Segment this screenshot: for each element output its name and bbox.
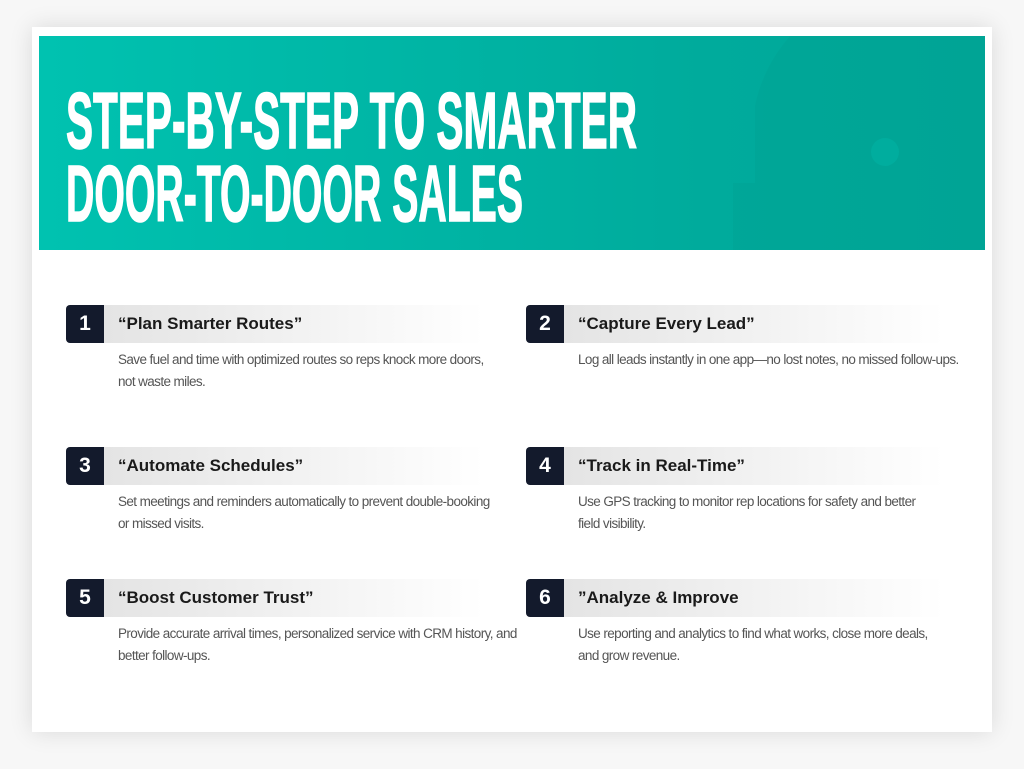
step 3: Set meetings and reminders automatically to prevent double-booking or missed visits. <box>118 494 490 531</box>
step 4: 4 <box>539 454 551 477</box>
step 6 <box>526 579 928 663</box>
step 4: Use GPS tracking to monitor rep locations for safety and better field visibility. <box>578 494 915 531</box>
step 2: “Capture Every Lead” <box>578 314 755 333</box>
step 2: 2 <box>539 312 551 335</box>
step 5: “Boost Customer Trust” <box>118 588 314 607</box>
step 1: “Plan Smarter Routes” <box>118 314 302 333</box>
step 4 <box>526 447 916 531</box>
banner <box>39 36 985 250</box>
step 6: Use reporting and analytics to find what works, close more deals, and grow revenue. <box>578 626 928 663</box>
step 2 <box>526 305 959 367</box>
title <box>66 76 637 238</box>
step 5: Provide accurate arrival times, personalized service with CRM history, and better follow-ups. <box>118 626 517 663</box>
step 1 <box>66 305 484 389</box>
step 3: “Automate Schedules” <box>118 456 303 475</box>
step 6: 6 <box>539 586 551 609</box>
step 1: 1 <box>79 312 91 335</box>
step 4: “Track in Real-Time” <box>578 456 745 475</box>
step 2: Log all leads instantly in one app—no lost notes, no missed follow-ups. <box>578 352 959 367</box>
step 5 <box>66 579 517 663</box>
decorative lock icon <box>39 36 985 250</box>
step 1: Save fuel and time with optimized routes so reps knock more doors, not waste miles. <box>118 352 484 389</box>
step 3 <box>66 447 490 531</box>
step 5: 5 <box>79 586 91 609</box>
step 6: ”Analyze & Improve <box>578 588 739 607</box>
step 3: 3 <box>79 454 91 477</box>
title: DOOR-TO-DOOR SALES <box>66 149 523 238</box>
